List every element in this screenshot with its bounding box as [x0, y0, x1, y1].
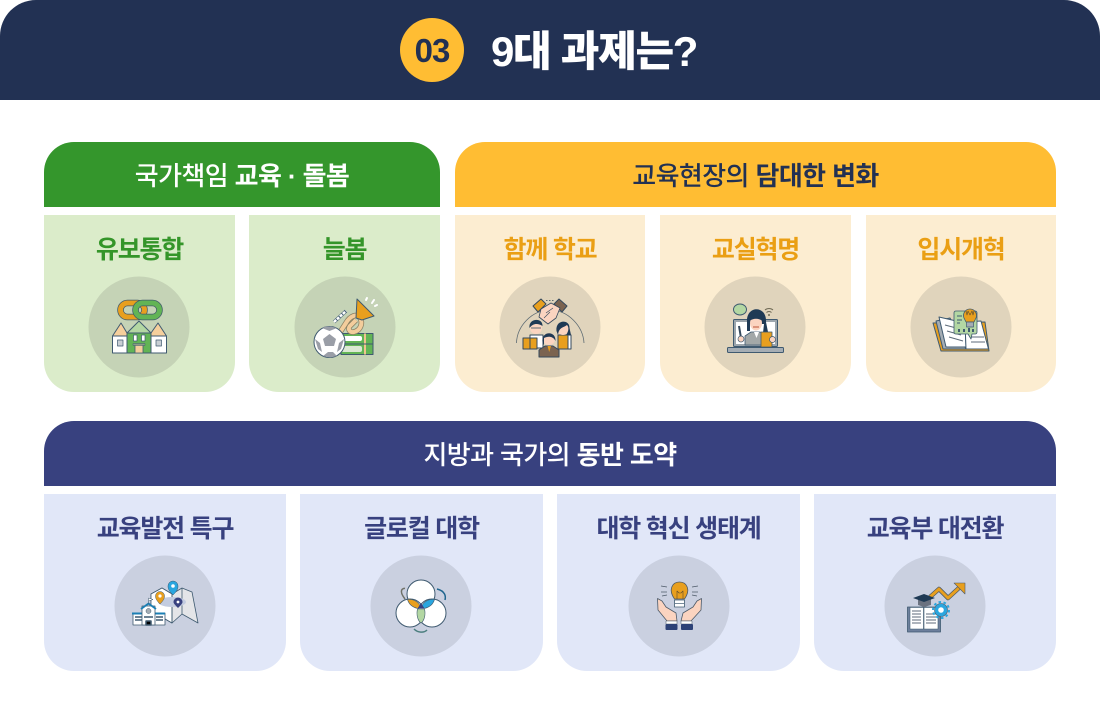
- icon: bulb and hands: [628, 556, 730, 656]
- number badge: [400, 18, 464, 82]
- panel: 대학 혁신 생태계: [557, 494, 800, 671]
- icon: online class laptop: [704, 276, 806, 378]
- card title: 교실혁명: [712, 236, 799, 264]
- panel: 교육부 대전환: [814, 494, 1056, 671]
- card title: 글로컬 대학: [364, 515, 479, 543]
- heading: education field: 교육현장의 담대한 변화: [632, 161, 879, 191]
- icon: book, cap, gear, arrow: [884, 556, 986, 656]
- card title: 늘봄: [323, 236, 366, 264]
- heading: education field: [455, 142, 1056, 207]
- panel: 교실혁명: [660, 215, 851, 392]
- icon: chain and school: [88, 276, 190, 378]
- panel: 함께 학교: [455, 215, 645, 392]
- icon: soccer ball, books, trumpet: [294, 276, 396, 378]
- card title: 대학 혁신 생태계: [596, 515, 761, 543]
- heading: regional partnership: 지방과 국가의 동반 도약: [423, 440, 677, 470]
- icon: book and idea: [910, 276, 1012, 378]
- card title: 입시개혁: [917, 236, 1005, 264]
- icon: handshake and students: [500, 276, 600, 378]
- number badge: 03: [415, 32, 449, 69]
- title: 9대 과제는?: [491, 28, 697, 75]
- heading: national responsibility: [44, 142, 440, 207]
- top banner: [0, 0, 1100, 100]
- panel: 글로컬 대학: [300, 494, 543, 671]
- heading: regional partnership: [44, 421, 1056, 486]
- card title: 교육부 대전환: [867, 515, 1003, 543]
- panel: 유보통합: [44, 215, 235, 392]
- panel: 교육발전 특구: [44, 494, 286, 671]
- card title: 유보통합: [96, 236, 183, 264]
- panel: 늘봄: [249, 215, 440, 392]
- card title: 교육발전 특구: [97, 515, 233, 543]
- icon: school and map pins: [114, 556, 216, 656]
- panel: 입시개혁: [866, 215, 1056, 392]
- icon: venn diagram: [370, 556, 472, 656]
- heading: national responsibility: 국가책임 교육 · 돌봄: [135, 161, 349, 191]
- card title: 함께 학교: [504, 236, 596, 264]
